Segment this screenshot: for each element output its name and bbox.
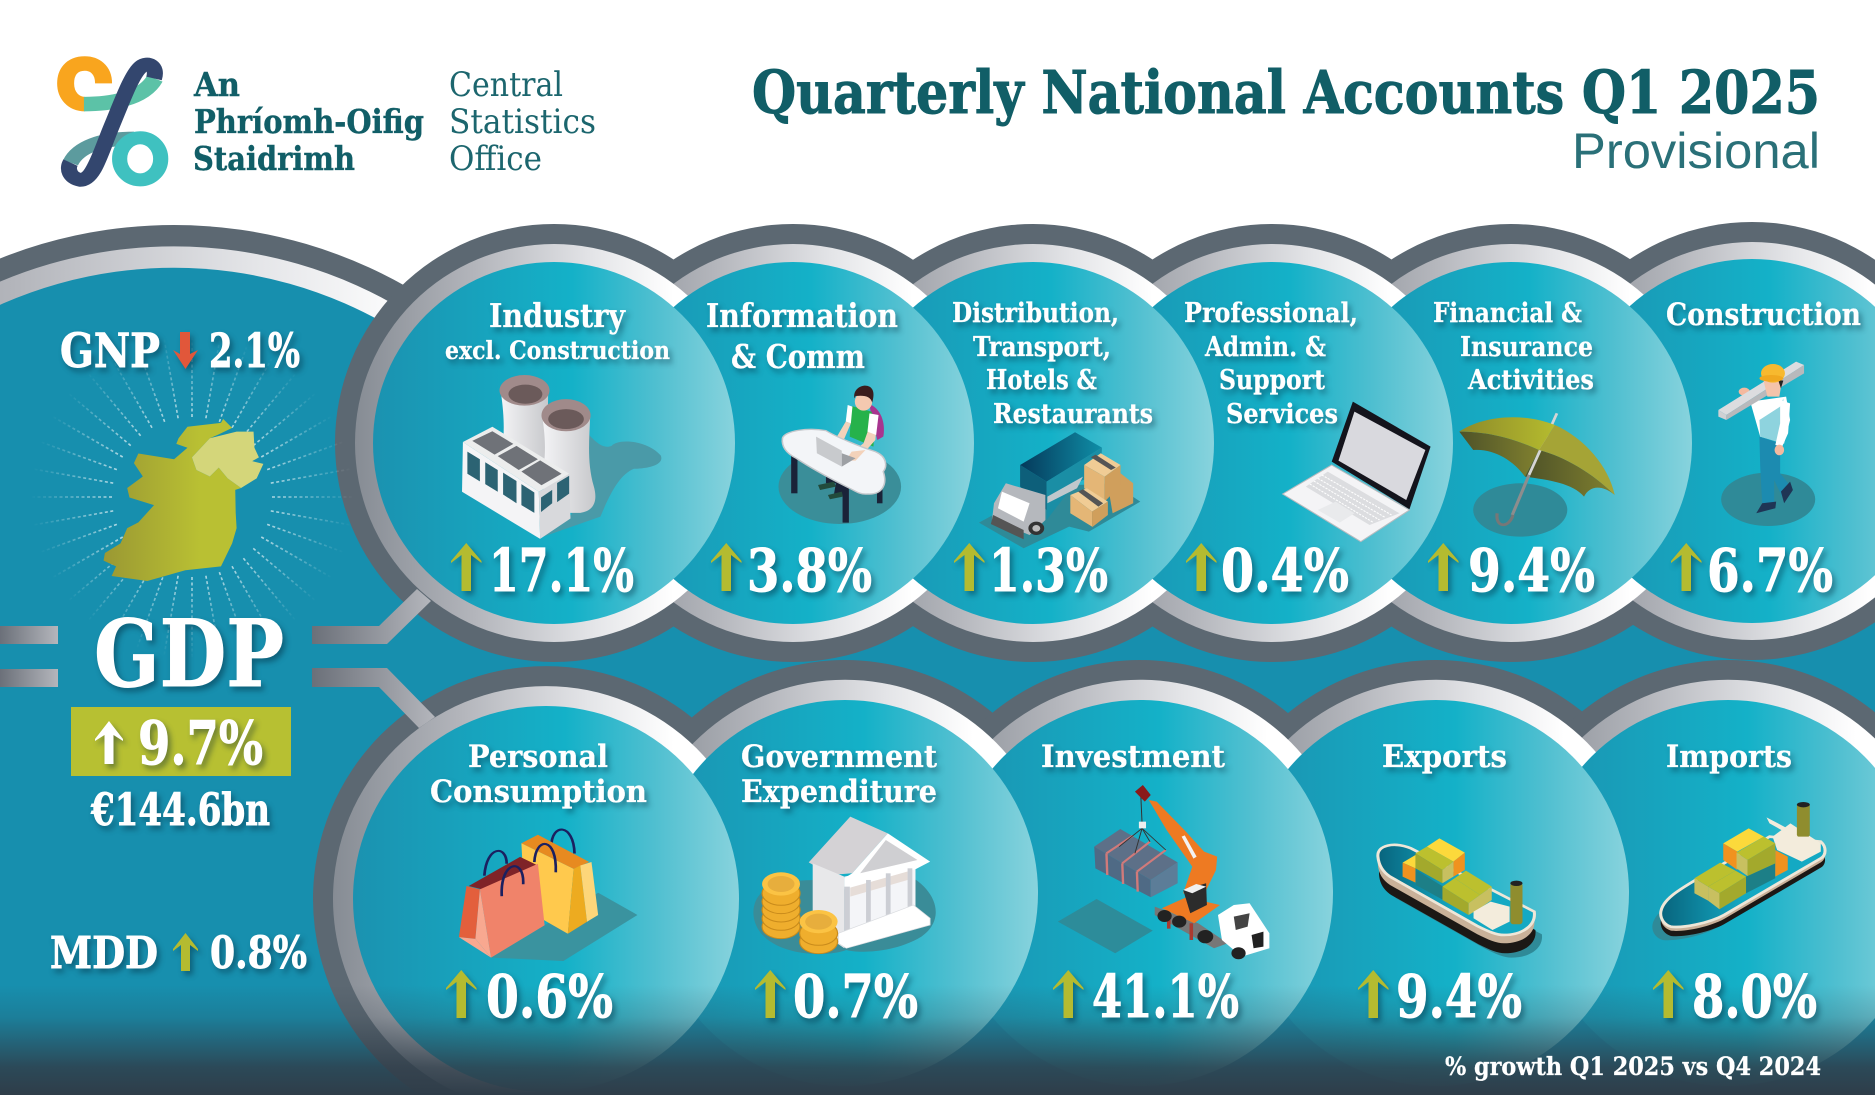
GNP stat: GNP: [60, 324, 160, 379]
label: Admin. &: [1204, 332, 1326, 363]
panel: Information & Comm: [706, 296, 901, 605]
icon: white up arrow: [95, 721, 123, 764]
logo text: Irish name: Phríomh-Oifig: [194, 102, 424, 141]
icon: crane lifting container: [1058, 785, 1269, 959]
logo text: English name: [449, 65, 596, 179]
logo text: English name: Office: [449, 139, 542, 179]
value with arrow: 17.1%: [489, 536, 634, 605]
icon: laptop: [1283, 402, 1431, 542]
value with arrow: 8.0%: [1692, 962, 1817, 1031]
label: Industry: [489, 296, 626, 335]
teal circle fills: [353, 259, 1875, 1092]
label: Hotels &: [986, 365, 1097, 396]
value with arrow: [711, 536, 872, 605]
value with arrow: [1671, 536, 1833, 605]
rays around Ireland: [30, 335, 354, 659]
value with arrow: [1653, 962, 1817, 1031]
label: Support: [1219, 365, 1325, 396]
value with arrow: [1186, 536, 1349, 605]
GDP growth box: [71, 707, 291, 779]
label: & Comm: [731, 337, 865, 376]
footnote: % growth Q1 2025 vs Q4 2024: [1445, 1052, 1821, 1081]
value with arrow: 3.8%: [747, 536, 872, 605]
label: Personal: [468, 739, 608, 775]
value with arrow: 6.7%: [1707, 536, 1833, 605]
label: [1184, 298, 1358, 430]
label: Services: [1226, 399, 1338, 430]
label: [706, 296, 898, 376]
value with arrow: 0.6%: [486, 962, 613, 1031]
panel: Distribution: [952, 298, 1153, 605]
panel: Government Expenditure: [741, 739, 938, 1031]
label: Distribution,: [952, 298, 1119, 329]
bottom dark fade: [0, 985, 1875, 1095]
GNP stat: [60, 324, 300, 379]
label: Transport,: [973, 332, 1111, 363]
panel: Financial: [1428, 298, 1615, 605]
icon: map of Ireland: [104, 419, 263, 581]
value with arrow: [1428, 536, 1595, 605]
value with arrow: 9.4%: [1468, 536, 1595, 605]
panel: Exports: [1358, 739, 1542, 1031]
value with arrow: 41.1%: [1092, 962, 1239, 1031]
panel: Imports: [1652, 739, 1825, 1031]
logo text: Irish name: An: [193, 65, 240, 104]
label: Government: [741, 739, 938, 775]
logo text: English name: Statistics: [449, 102, 596, 142]
GDP connector bars: [0, 589, 435, 728]
label: [741, 739, 938, 810]
value with arrow: 1.3%: [989, 536, 1108, 605]
label: [952, 298, 1153, 430]
panel: Personal Consumption: [430, 739, 647, 1031]
label: Professional,: [1184, 298, 1358, 329]
value with arrow: 0.4%: [1221, 536, 1349, 605]
GNP stat: 2.1%: [209, 324, 300, 379]
icon: red down arrow: [173, 332, 198, 369]
GDP heading: GDP: [94, 599, 284, 708]
label: Financial &: [1433, 298, 1582, 329]
panel: Professional: [1184, 298, 1431, 605]
logo text: Irish name: [193, 65, 424, 178]
label: Investment: [1041, 739, 1226, 775]
value with arrow: [446, 962, 613, 1031]
label: excl. Construction: [445, 336, 670, 365]
silver rings: [333, 242, 1875, 1095]
icon: shopping bags: [459, 830, 637, 961]
label: [1433, 298, 1594, 396]
logo text: English name: Central: [449, 65, 563, 105]
label: Imports: [1666, 739, 1792, 775]
panel: Investment: [1041, 739, 1269, 1031]
logo: Central Statistics Office: [66, 64, 596, 180]
logo text: Irish name: Staidrimh: [193, 139, 355, 178]
label: Expenditure: [741, 774, 937, 810]
background panel: [0, 443, 1875, 1095]
icon: umbrella: [1459, 413, 1615, 537]
label: Activities: [1467, 365, 1594, 396]
icon: bank and coins: [753, 817, 936, 954]
icon: construction worker: [1718, 362, 1815, 526]
value with arrow: [1358, 962, 1522, 1031]
label: [445, 296, 670, 365]
value with arrow: [451, 536, 634, 605]
label: Consumption: [430, 774, 647, 810]
MDD stat: [50, 928, 307, 979]
outer dark rings: [313, 222, 1875, 1095]
icon: factory: [462, 375, 661, 539]
value with arrow: [1053, 962, 1239, 1031]
MDD stat: 0.8%: [210, 928, 307, 979]
icon: container ship: [1652, 802, 1825, 940]
label: Information: [706, 296, 898, 335]
icon: person at desk: [779, 386, 901, 524]
icon: olive up arrow: [173, 933, 198, 971]
label: [430, 739, 647, 810]
icon: truck and boxes: [979, 432, 1140, 548]
value with arrow: [954, 536, 1108, 605]
GDP big circle ring: [0, 225, 601, 500]
subtitle: Provisional: [1572, 123, 1820, 179]
logo mark: [66, 64, 161, 180]
label: Restaurants: [993, 399, 1153, 430]
value with arrow: 9.4%: [1396, 962, 1522, 1031]
icon: container ship: [1378, 838, 1542, 958]
value with arrow: 0.7%: [793, 962, 918, 1031]
GDP value: €144.6bn: [90, 785, 270, 836]
panel: Construction: [1666, 297, 1861, 605]
panel: Industry: [445, 296, 670, 605]
GDP growth box: 9.7%: [138, 709, 263, 779]
MDD stat: MDD: [50, 928, 158, 979]
label: Insurance: [1460, 332, 1593, 363]
value with arrow: [755, 962, 918, 1031]
label: Exports: [1382, 739, 1507, 775]
